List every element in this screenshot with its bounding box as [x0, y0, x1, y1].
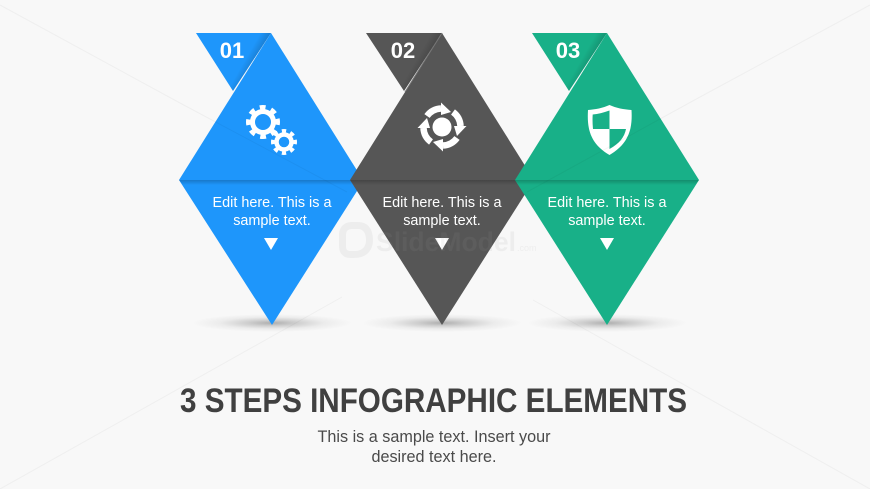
shadows under the diamonds	[192, 314, 687, 332]
fold band: step 03	[515, 180, 699, 185]
panel: step 01	[179, 33, 364, 325]
subtitle: This is a sample text. Insert your	[317, 428, 551, 446]
arrow: step 01	[264, 238, 278, 250]
faint lines over the diamonds	[180, 97, 700, 192]
lower triangle: step 01	[179, 180, 364, 325]
tab: step 03: 03	[556, 38, 580, 63]
text: step 03: Edit here. This is a	[548, 195, 666, 211]
tab: step 03	[532, 33, 607, 91]
tab: step 02	[366, 33, 442, 91]
watermark: SlideModel	[376, 227, 516, 257]
text: step 01: sample text.	[233, 213, 311, 229]
text: step 01: Edit here. This is a	[213, 195, 331, 211]
title: 3 STEPS INFOGRAPHIC ELEMENTS	[180, 382, 687, 420]
watermark: .com	[517, 243, 537, 253]
subtitle: desired text here.	[371, 448, 497, 466]
icon: shield	[588, 105, 632, 155]
lower triangle: step 02	[350, 180, 534, 325]
icon: gears	[248, 108, 295, 153]
text: step 02: Edit here. This is a	[383, 195, 501, 211]
arrow: step 03	[600, 238, 614, 250]
panel: step 02	[350, 33, 534, 325]
panel: step 03	[515, 33, 699, 325]
text: step 02: sample text.	[403, 213, 481, 229]
tab: step 02: 02	[391, 38, 415, 63]
arrow: step 02	[435, 238, 449, 250]
upper triangle: step 02	[350, 33, 534, 180]
upper triangle: step 01	[179, 33, 363, 180]
tab: step 01	[196, 33, 271, 91]
text: step 03: sample text.	[568, 213, 646, 229]
icon: circular arrows	[418, 102, 466, 152]
upper triangle: step 03	[515, 33, 699, 180]
fold band: step 01	[179, 180, 364, 185]
lower triangle: step 03	[515, 180, 699, 325]
tab: step 01: 01	[220, 38, 244, 63]
fold highlight: step 02	[405, 33, 442, 92]
fold band: step 02	[350, 180, 534, 185]
watermark	[339, 222, 537, 258]
